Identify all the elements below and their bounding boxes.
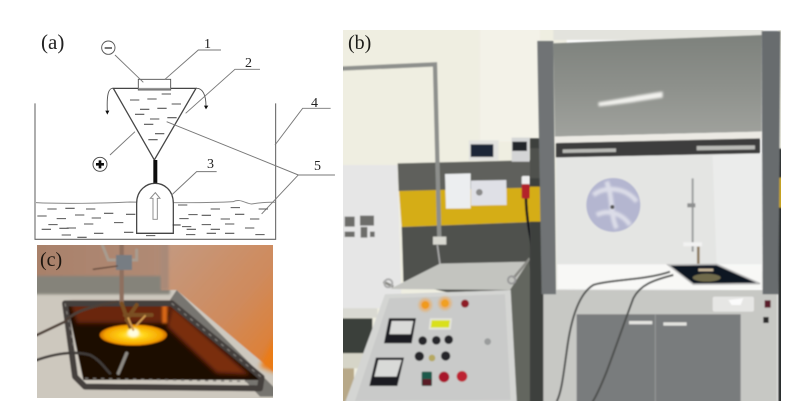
electrical box right: [512, 138, 530, 162]
cables: [30, 302, 127, 373]
leader lines: [110, 50, 335, 214]
white switch on cabinet: [713, 297, 754, 312]
ammeter: [369, 358, 404, 386]
lighter wall section: [480, 25, 540, 142]
cabinet doors: [577, 314, 741, 408]
panel b: photo of laboratory setup: [340, 25, 788, 408]
number 1: 1: [204, 37, 211, 52]
window sill and bottom left items: [343, 308, 378, 401]
panel a: electrolysis schematic: [35, 30, 335, 239]
electrolyte dashes in cone: [130, 94, 181, 140]
left part of photo: wall and control cabinet: [340, 25, 567, 408]
number 5: 5: [314, 159, 321, 174]
electrical box left: [469, 140, 499, 160]
cabinet base: [543, 290, 777, 408]
small tray: [668, 264, 760, 284]
discharge spark: [127, 328, 139, 337]
background wall and floor: [37, 245, 273, 398]
control cabinet body: [344, 257, 531, 401]
upward arrow: [150, 193, 160, 219]
clamp and rod: [93, 240, 152, 330]
wall: [343, 30, 567, 376]
number 4: 4: [311, 96, 318, 111]
conductive stem: [153, 160, 157, 185]
terminal minus: [102, 41, 115, 54]
tank: [35, 103, 276, 239]
notices on wall: [445, 173, 507, 209]
conduit: [340, 64, 439, 238]
light strip and bar: [555, 132, 762, 158]
hood interior brighter right wall: [756, 154, 762, 254]
label (b): (b): [348, 32, 371, 54]
number 2: 2: [245, 56, 252, 71]
voltmeter: [384, 318, 416, 343]
electrolyte dashes in tank: [37, 205, 268, 237]
overflow arrows: [105, 88, 208, 115]
tray with dark molten interior: [65, 302, 262, 388]
socket and cable: [520, 174, 531, 242]
black switches: [415, 335, 453, 361]
hood floor: [557, 264, 762, 289]
right part of photo: fume hood: [530, 25, 788, 408]
glass sash: [553, 35, 762, 137]
top strip above hood: [554, 30, 764, 40]
panel c: photo of plasma discharge in tray: [37, 245, 273, 398]
wall outlet: [433, 237, 446, 264]
cathode block 1: [138, 79, 171, 90]
anode cone: [113, 88, 196, 160]
grey and yellow painted wall: [396, 160, 531, 293]
background behind hood: [530, 25, 788, 408]
hood interior: [556, 153, 763, 290]
schematic lines: [35, 41, 335, 239]
terminal plus: [93, 157, 107, 171]
cables to tray: [557, 272, 673, 403]
indicator lamps: [419, 297, 469, 312]
label (c): (c): [40, 249, 62, 271]
small controls: [763, 300, 771, 323]
sample dome 3: [137, 183, 173, 233]
retort stand: [683, 178, 702, 265]
round disc on wall: [586, 178, 640, 232]
number 3: 3: [207, 157, 214, 172]
lower white panel: [340, 165, 402, 308]
digital display: [429, 318, 452, 330]
posts: [537, 31, 781, 294]
glass reflection: [598, 92, 663, 106]
electrolyte surface: [36, 201, 275, 204]
label (a): (a): [41, 30, 64, 54]
poster scraps: [345, 216, 375, 238]
coloured push buttons: [422, 338, 491, 386]
glowing melt pool: [100, 324, 167, 346]
